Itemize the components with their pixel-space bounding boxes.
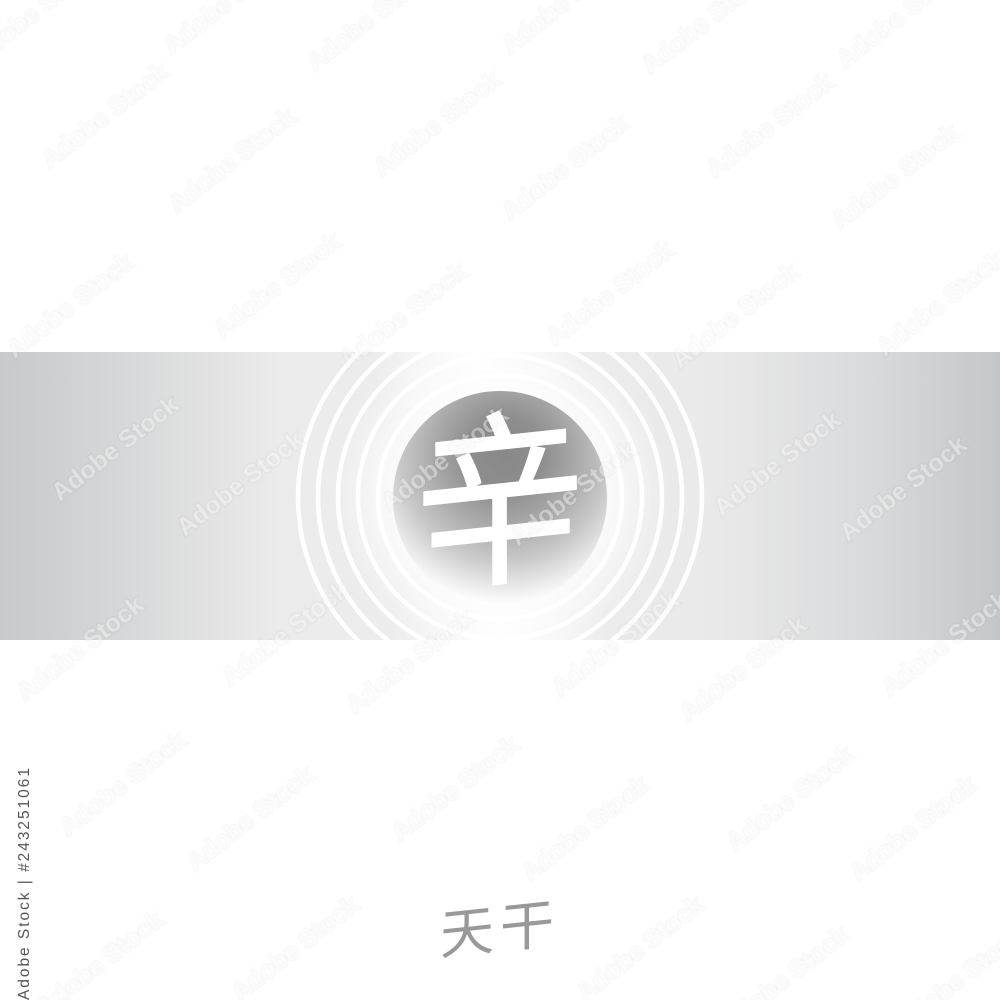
watermark pattern: Adobe Stock <box>368 66 506 182</box>
stock id text: Adobe Stock | #243251061 <box>16 768 33 1000</box>
watermark pattern: Adobe Stock <box>181 761 319 877</box>
watermark pattern: Adobe Stock <box>208 228 346 344</box>
watermark pattern: Adobe Stock <box>516 771 654 887</box>
watermark pattern: Adobe Stock <box>708 406 846 522</box>
watermark pattern: Adobe Stock <box>666 258 804 374</box>
watermark pattern: Adobe Stock <box>376 401 514 517</box>
watermark pattern: Adobe Stock <box>674 611 812 727</box>
watermark pattern: Adobe Stock <box>826 119 964 235</box>
concentric white rings <box>296 352 704 640</box>
watermark pattern: Adobe Stock <box>504 436 642 552</box>
watermark pattern: Adobe Stock <box>834 431 972 547</box>
watermark pattern: Adobe Stock <box>341 604 479 720</box>
watermark pattern: Adobe Stock <box>844 771 982 887</box>
watermark pattern: Adobe Stock <box>11 591 149 707</box>
watermark pattern: Adobe Stock <box>171 426 309 542</box>
watermark pattern: Adobe Stock <box>386 731 524 847</box>
watermark pattern: Adobe Stock <box>541 236 679 352</box>
grey horizontal band <box>0 352 1000 640</box>
watermark pattern: Adobe Stock <box>163 103 301 219</box>
watermark pattern: Adobe Stock <box>701 68 839 184</box>
watermark pattern: Adobe Stock <box>36 58 174 174</box>
watermark pattern: Adobe Stock <box>496 110 634 226</box>
watermark pattern: Adobe Stock <box>54 726 192 842</box>
watermark pattern: Adobe Stock <box>334 258 472 374</box>
watermark pattern: Adobe Stock <box>1 248 139 364</box>
watermark pattern: Adobe Stock <box>546 586 684 702</box>
watermark pattern: Adobe Stock <box>721 741 859 857</box>
grey orb <box>393 391 607 605</box>
main character: 辛 <box>415 344 585 632</box>
watermark pattern: Adobe Stock <box>46 391 184 507</box>
caption: heavenly stems: 天干 <box>440 879 560 970</box>
watermark pattern: Adobe Stock <box>216 576 354 692</box>
